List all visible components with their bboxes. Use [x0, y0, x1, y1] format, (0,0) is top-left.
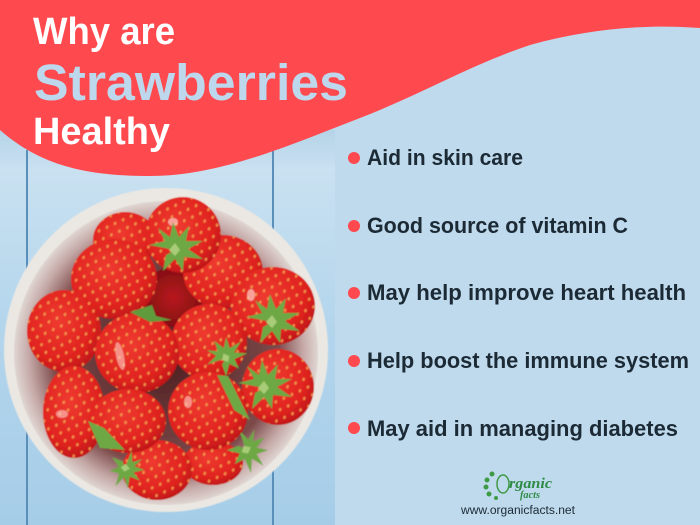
- background: wooden planks: [0, 130, 335, 525]
- red wave header: [0, 0, 700, 176]
- strawberries: [27, 197, 315, 500]
- logo: Organic Facts: [460, 472, 576, 517]
- logo: Organic Facts: facts: [520, 490, 540, 501]
- bullet: immune system: Help boost the immune system: [367, 348, 689, 373]
- icon: leaf swirl: [484, 472, 509, 500]
- bullet: vitamin C: Good source of vitamin C: [367, 213, 628, 238]
- bowl: [4, 188, 328, 512]
- bullet: heart health: May help improve heart health: [367, 280, 686, 305]
- bullet: skin care: Aid in skin care: [367, 145, 523, 170]
- logo: Organic Facts: www.organicfacts.net: [460, 505, 576, 517]
- benefit list: [348, 145, 689, 441]
- title: Strawberries: [34, 54, 348, 111]
- logo: Organic Facts: rganic: [509, 476, 552, 492]
- bullet: diabetes: May aid in managing diabetes: [367, 416, 678, 441]
- bowl of strawberries photo: [4, 188, 328, 512]
- title: [33, 11, 348, 153]
- title: Healthy: [33, 111, 170, 153]
- title: Why are: [33, 11, 175, 53]
